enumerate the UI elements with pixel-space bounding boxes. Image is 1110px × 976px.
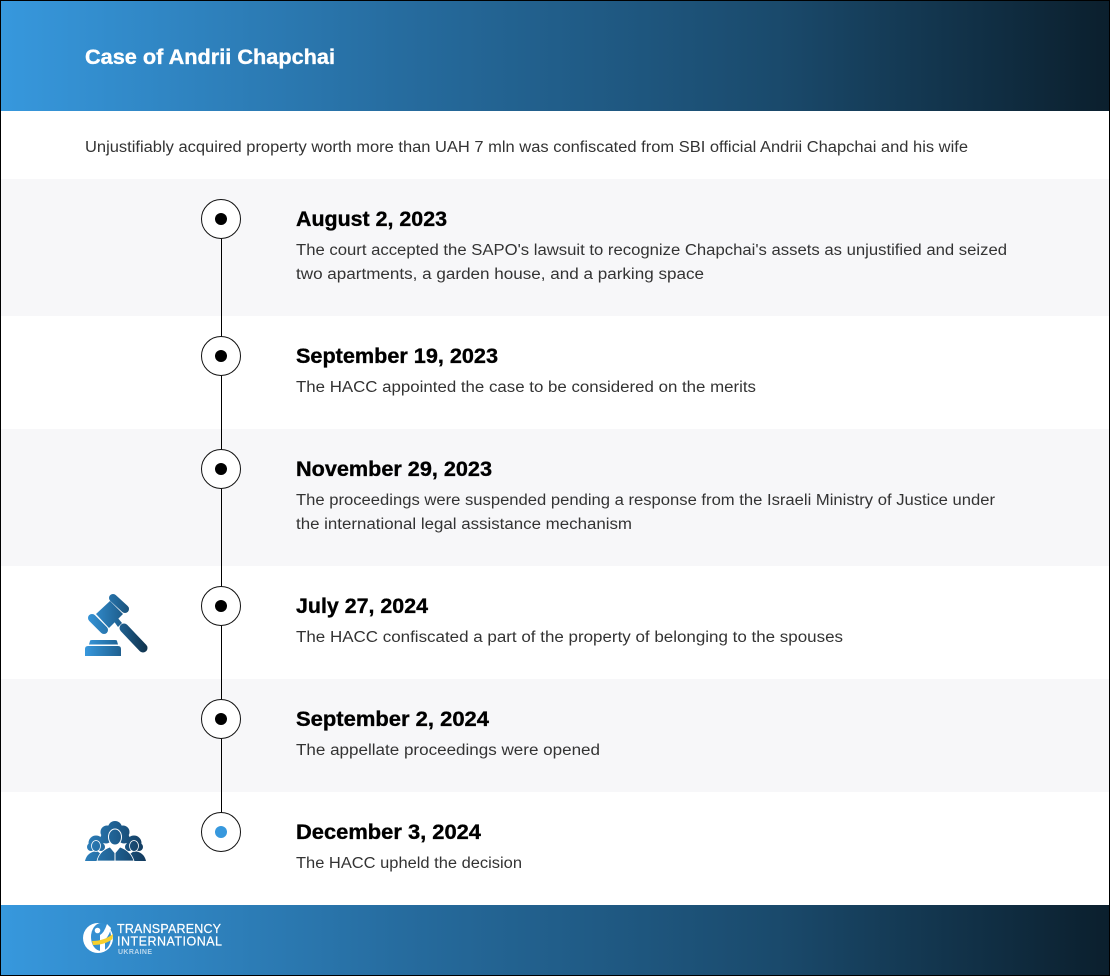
timeline entry: August 2, 2023: two apartments, a garden house, and a parking space — [296, 266, 704, 283]
timeline entry: December 3, 2024: The HACC upheld the decision — [296, 855, 522, 872]
intro text: Unjustifiably acquired property worth more than UAH 7 mln was confiscated from SBI official Andrii Chapchai and his wife — [85, 139, 968, 156]
timeline entry: November 29, 2023: the international legal assistance mechanism — [296, 516, 632, 533]
timeline entry: August 2, 2023: August 2, 2023 — [296, 208, 447, 231]
logo: Transparency International Ukraine: INTERNATIONAL — [117, 934, 222, 948]
timeline entry: August 2, 2023 — [202, 200, 1007, 283]
icon: group of judges — [85, 821, 146, 861]
timeline entry: July 27, 2024 — [202, 586, 843, 646]
title: Case of Andrii Chapchai — [85, 46, 335, 69]
icon: gavel — [85, 598, 143, 656]
row backgrounds — [1, 179, 1109, 792]
timeline entry: November 29, 2023: The proceedings were suspended pending a response from the Israeli Ministry of Justice under — [296, 492, 995, 509]
timeline entry: July 27, 2024: July 27, 2024 — [296, 595, 428, 618]
footer banner — [1, 905, 1109, 975]
timeline entry: September 2, 2024 — [202, 700, 600, 759]
timeline entry: September 19, 2023: The HACC appointed the case to be considered on the merits — [296, 379, 756, 396]
timeline entry: December 3, 2024: December 3, 2024 — [296, 821, 481, 844]
header banner — [1, 1, 1109, 111]
timeline entry: December 3, 2024 — [202, 812, 522, 872]
logo: Transparency International Ukraine: TRANSPARENCY — [117, 922, 222, 936]
timeline axis — [221, 219, 222, 832]
timeline entry: September 2, 2024: The appellate proceedings were opened — [296, 742, 600, 759]
logo: Transparency International Ukraine — [83, 922, 222, 956]
timeline entry: September 19, 2023 — [202, 336, 756, 396]
timeline entry: November 29, 2023 — [202, 450, 995, 533]
timeline entry: August 2, 2023: The court accepted the SAPO's lawsuit to recognize Chapchai's assets as unjustified and seized — [296, 242, 1007, 259]
timeline entry: November 29, 2023: November 29, 2023 — [296, 458, 492, 481]
logo: Transparency International Ukraine: UKRAINE — [118, 949, 152, 956]
timeline entry: September 2, 2024: September 2, 2024 — [296, 708, 489, 731]
timeline entry: July 27, 2024: The HACC confiscated a part of the property of belonging to the spouses — [296, 629, 843, 646]
timeline entry: September 19, 2023: September 19, 2023 — [296, 345, 498, 368]
